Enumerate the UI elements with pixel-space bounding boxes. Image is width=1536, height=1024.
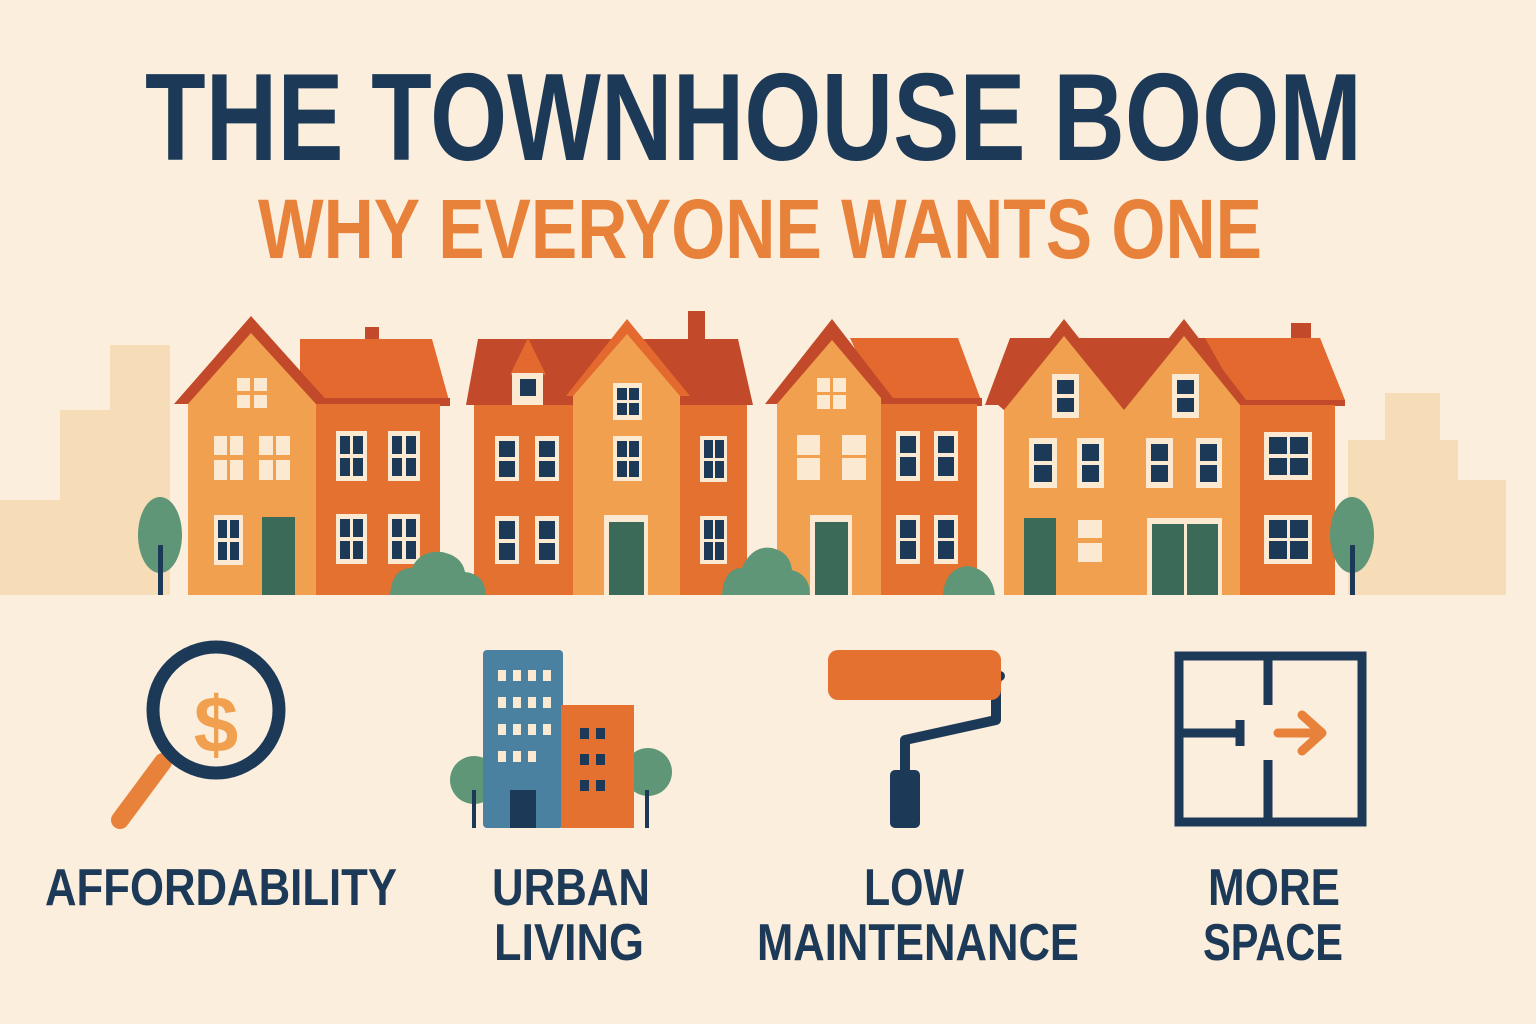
label: affordability: AFFORDABILITY (45, 859, 397, 917)
icon: magnifier with dollar: $ (194, 680, 238, 769)
label: urban living: LIVING (494, 914, 644, 972)
label: urban living (492, 859, 650, 972)
label: more space (1203, 859, 1343, 972)
house 2 (466, 311, 753, 595)
house 1 (174, 316, 450, 595)
label: low maintenance: MAINTENANCE (757, 914, 1079, 972)
label: more space: SPACE (1203, 914, 1343, 972)
label: urban living: URBAN (492, 859, 650, 917)
background city skyline (0, 345, 1506, 595)
label: more space: MORE (1208, 859, 1340, 917)
subtitle: WHY EVERYONE WANTS ONE (258, 182, 1262, 276)
label: low maintenance (757, 859, 1079, 972)
icon: urban buildings (450, 650, 672, 828)
house 4 (985, 319, 1345, 595)
townhouse row (138, 311, 1374, 595)
icon: magnifier with dollar (120, 647, 279, 820)
label: low maintenance: LOW (864, 859, 965, 917)
icon: floor plan (1179, 656, 1362, 822)
icon: paint roller (828, 650, 1001, 828)
house 3 (765, 319, 982, 595)
trees and bushes (138, 497, 1374, 595)
